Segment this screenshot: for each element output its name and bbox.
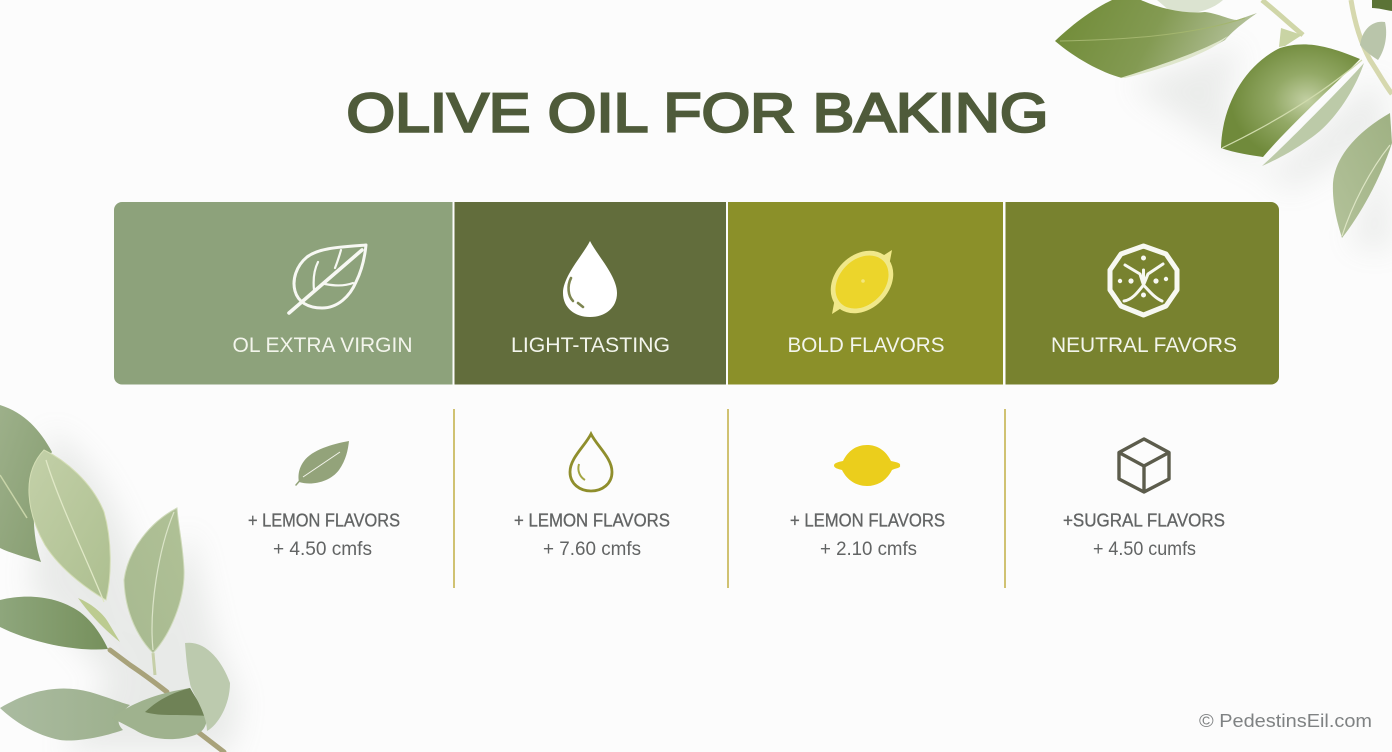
text: 7.60: + 7.60 cmfs — [543, 538, 641, 560]
icon: solid leaf — [296, 441, 349, 485]
icon: leaf outline — [289, 245, 366, 313]
text: sugral flavors: +SUGRAL FLAVORS — [1063, 510, 1225, 530]
column: bold flavors details — [790, 445, 945, 560]
label: neutral flavors: NEUTRAL FAVORS — [1051, 333, 1237, 357]
text: lemon flavors: + LEMON FLAVORS — [790, 510, 945, 530]
panel: extra virgin — [114, 202, 452, 384]
icon: solid lemon — [834, 445, 900, 486]
text: 4.50: + 4.50 cmfs — [273, 538, 372, 560]
text: lemon flavors: + LEMON FLAVORS — [514, 510, 670, 530]
text: 2.10: + 2.10 cmfs — [820, 538, 917, 560]
column: neutral flavors details — [1063, 439, 1225, 560]
column: extra virgin details — [248, 441, 400, 560]
icon: sugar cube — [1119, 439, 1169, 492]
panel: bold flavors — [728, 202, 1003, 384]
leaves: top-right branch — [1055, 0, 1392, 250]
label: bold flavors: BOLD FLAVORS — [788, 333, 944, 357]
icon: solid drop — [563, 241, 617, 317]
column: light-tasting details — [514, 434, 670, 560]
label: light-tasting: LIGHT-TASTING — [511, 333, 670, 357]
watermark: © PedestinsEil.com — [1199, 711, 1372, 731]
column dividers — [453, 409, 1006, 588]
icon: lemon slice — [818, 238, 906, 326]
panel: light-tasting — [454, 202, 726, 384]
text: 4.50: + 4.50 cumfs — [1093, 538, 1196, 560]
leaves: bottom-left sprig — [0, 405, 240, 752]
title: OLIVE OIL FOR BAKING — [346, 82, 1048, 144]
icon: outline drop — [570, 434, 612, 491]
text: lemon flavors: + LEMON FLAVORS — [248, 510, 400, 530]
panel: neutral flavors — [1006, 202, 1279, 384]
icon: octagon emblem — [1110, 246, 1177, 315]
label: extra virgin: OL EXTRA VIRGIN — [232, 333, 412, 357]
